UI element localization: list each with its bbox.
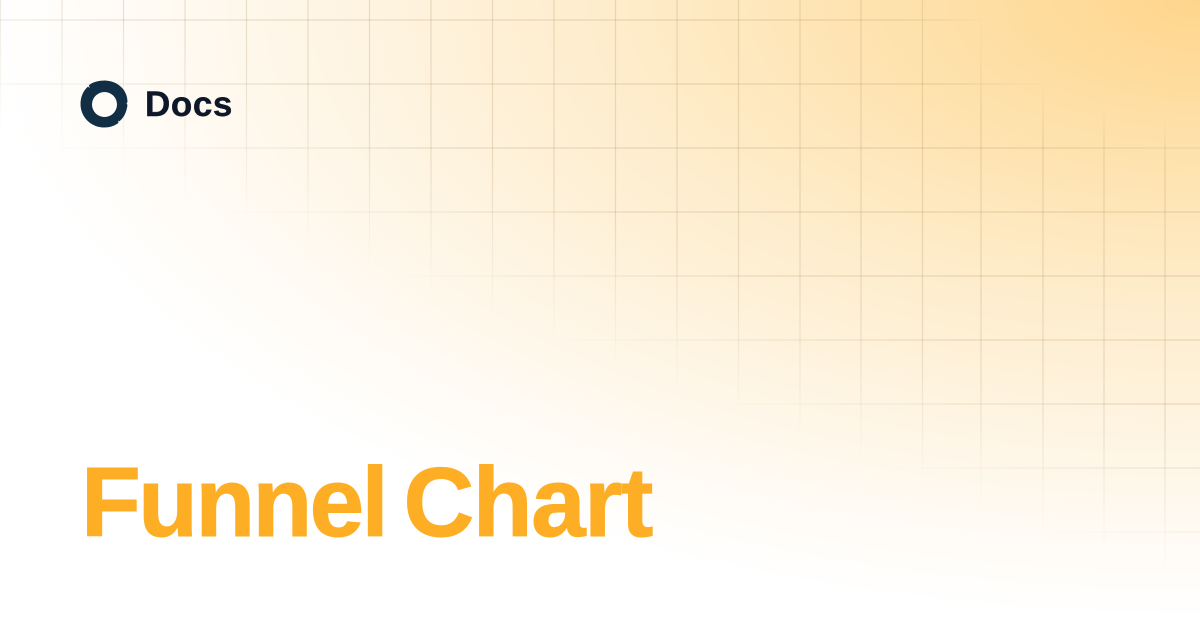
title: Funnel Chart — [81, 447, 652, 557]
icon: docs logo ring — [80, 80, 128, 128]
logo wordmark: Docs — [145, 85, 233, 124]
